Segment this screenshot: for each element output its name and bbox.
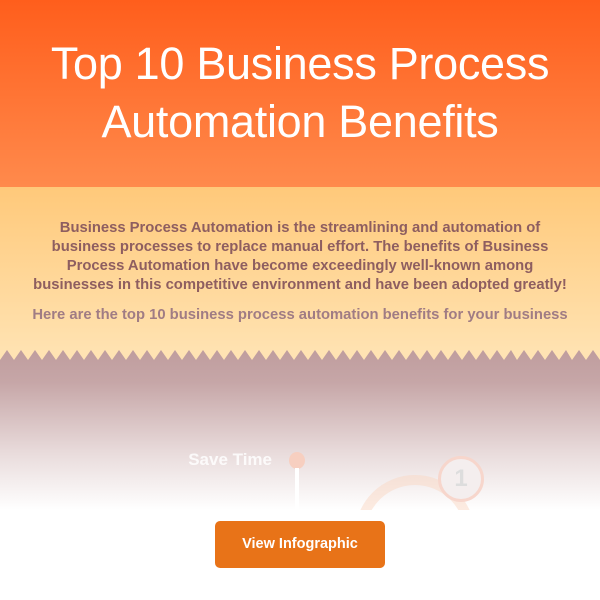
intro panel [0, 187, 600, 357]
button: View Infographic [242, 536, 358, 552]
intro paragraph: Business Process Automation is the streamlining and automation of [60, 220, 540, 236]
title: Top 10 Business Process [51, 38, 549, 89]
title: Automation Benefits [101, 96, 499, 147]
intro paragraph: businesses in this competitive environment and have been adopted greatly! [33, 277, 567, 293]
subheading: Here are the top 10 business process automation benefits for your business [32, 307, 568, 323]
icon circle [355, 475, 475, 595]
timeline dot [289, 452, 305, 469]
zigzag edge [0, 350, 600, 360]
timeline line [295, 468, 299, 518]
intro paragraph [33, 220, 567, 293]
number badge 1: 1 [454, 465, 468, 492]
intro paragraph: Process Automation have become exceedingly well-known among [67, 258, 533, 274]
faded preview area [0, 350, 600, 510]
number badge 1 [438, 456, 484, 502]
title [51, 38, 549, 147]
button [215, 521, 385, 568]
header banner [0, 0, 600, 187]
item label: save time: Save Time [188, 450, 272, 469]
intro paragraph: business processes to replace manual effort. The benefits of Business [52, 239, 548, 255]
